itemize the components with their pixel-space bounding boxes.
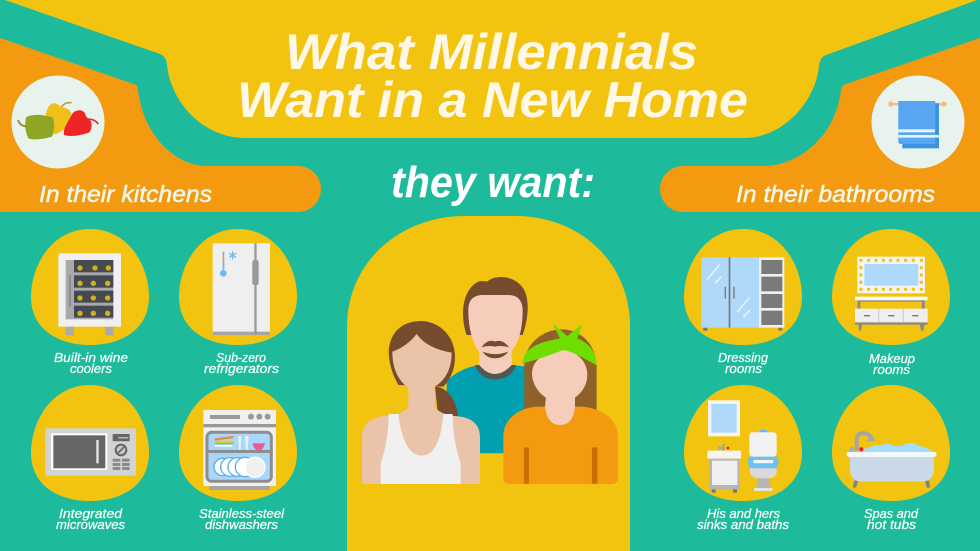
title: What Millennials <box>285 24 698 80</box>
title: Want in a New Home <box>237 72 748 128</box>
figure: woman with bandana <box>503 323 618 484</box>
title <box>237 24 748 128</box>
item: sinks and baths: His and hers <box>707 506 780 521</box>
item: dressing room: Dressing <box>718 350 769 365</box>
top yellow banner <box>5 0 977 138</box>
item: dishwasher <box>179 385 297 532</box>
item: makeup room: rooms <box>873 362 911 377</box>
central arch panel <box>347 216 630 551</box>
right orange panel <box>660 38 980 212</box>
item: sinks and baths <box>684 385 802 532</box>
icon: peppers <box>12 76 104 168</box>
item: wine cooler <box>31 229 149 376</box>
item: dishwasher: Stainless-steel <box>199 506 285 521</box>
item: spas and hot tubs: Spas and <box>864 506 919 521</box>
item: refrigerator <box>179 229 297 376</box>
item: refrigerator: refrigerators <box>204 361 280 376</box>
item: dressing room <box>684 229 802 376</box>
item: refrigerator: Sub-zero <box>216 350 266 365</box>
heading: in their bathrooms: In their bathrooms <box>736 181 936 207</box>
item: spas and hot tubs: hot tubs <box>867 517 917 532</box>
item: sinks and baths: sinks and baths <box>697 517 789 532</box>
heading: in their kitchens: In their kitchens <box>39 181 213 207</box>
item: wine cooler: coolers <box>70 361 112 376</box>
icon: towel <box>872 76 964 168</box>
item: makeup room <box>832 229 950 377</box>
illustration: millennial family <box>362 277 618 484</box>
item: makeup room: Makeup <box>869 351 915 366</box>
item: dressing room: rooms <box>725 361 763 376</box>
figure: woman in tank top <box>362 321 480 484</box>
subtitle: they want: they want: <box>391 158 595 207</box>
figure: man <box>447 277 528 453</box>
item: microwave: Integrated <box>59 506 123 521</box>
item: wine cooler: Built-in wine <box>54 350 128 365</box>
item: microwave <box>31 385 149 532</box>
item: microwave: microwaves <box>56 517 126 532</box>
item: dishwasher: dishwashers <box>205 517 278 532</box>
left orange panel <box>0 38 321 212</box>
item: spas and hot tubs <box>832 385 950 532</box>
